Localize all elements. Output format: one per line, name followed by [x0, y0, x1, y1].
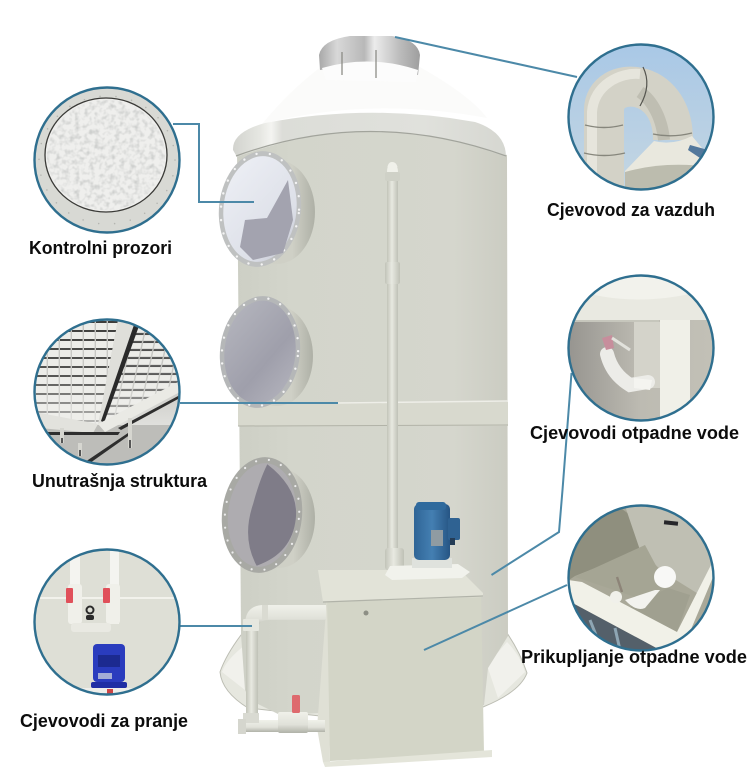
photo: pebble filled window: [35, 88, 179, 232]
blue pump motor: [385, 502, 470, 580]
leader lines: [173, 37, 577, 650]
line: washing pipes: [180, 625, 252, 627]
callout: air duct: [568, 44, 716, 195]
label: washing pipes: Cjevovodi za pranje: [20, 711, 188, 731]
vertical water riser pipe: [385, 162, 404, 572]
photo: pump with pipes: [35, 550, 179, 695]
label: internal structure: Unutrašnja struktura: [32, 471, 208, 491]
callout: washing pipes: [34, 550, 180, 695]
middle flange band: [238, 401, 508, 426]
scrubber tower: [213, 36, 527, 767]
label: waste water collection: Prikupljanje otpadne vode: [521, 647, 747, 667]
line: waste water pipes: [492, 373, 572, 575]
label: waste water pipes: Cjevovodi otpadne vode: [530, 423, 739, 443]
collection tank: [317, 570, 492, 767]
photo: open collection box: [567, 506, 716, 650]
photo: grating: [35, 320, 180, 464]
ring: [568, 506, 714, 650]
photo: curved duct: [569, 45, 716, 195]
callout: waste water pipes: [568, 276, 714, 420]
line: control window: [173, 124, 254, 202]
photo: drain elbow: [569, 276, 713, 420]
label: control windows: Kontrolni prozori: [29, 238, 172, 258]
base skirt flare: [220, 633, 527, 716]
red valve handle: [292, 695, 300, 713]
top rim collar: [233, 113, 506, 157]
inspection window top: [213, 147, 315, 271]
line: air duct: [395, 37, 577, 77]
callout: waste water collection: [567, 506, 716, 650]
label: air duct: Cjevovod za vazduh: [547, 200, 715, 220]
ring: [568, 276, 714, 420]
inspection window bottom: [216, 453, 315, 577]
ring: [568, 44, 714, 190]
top cone: [262, 66, 487, 124]
line: waste water collection: [424, 585, 567, 650]
inspection window middle: [214, 292, 313, 412]
line: internal structure: [180, 402, 338, 404]
ring: [34, 88, 180, 232]
air outlet neck: [319, 36, 420, 82]
ring: [34, 320, 180, 464]
tower body: [237, 130, 508, 715]
callout: control window: [34, 88, 180, 232]
washing pipe assembly: [238, 605, 326, 734]
ring: [34, 550, 180, 694]
callout: internal structure: [34, 320, 180, 464]
